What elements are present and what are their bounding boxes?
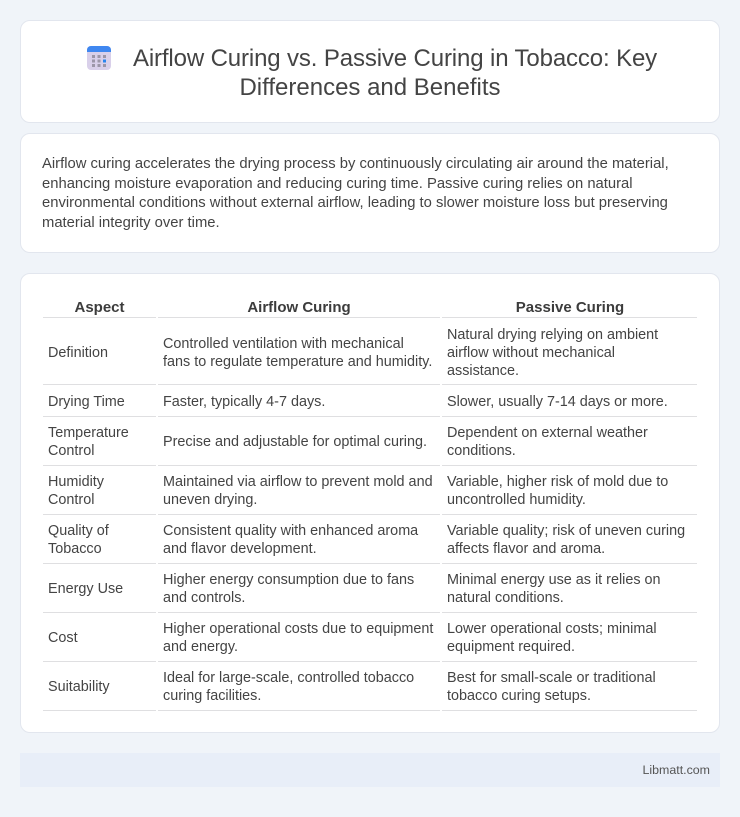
table rows: Higher energy consumption due to fans [163,572,414,588]
intro paragraph: environmental conditions without external airflow, leading to slower moisture loss but preserving [42,195,668,211]
intro paragraph: enhancing moisture evaporation and reducing curing time. Passive curing relies on natural [42,176,633,192]
table rows: Natural drying relying on ambient [447,327,658,343]
table rows: Energy Use [48,581,123,597]
table rows: Best for small-scale or traditional [447,670,656,686]
table rows: Definition [48,345,108,361]
title [133,45,657,100]
table rows: equipment required. [447,639,575,655]
table rows: tobacco curing setups. [447,688,591,704]
title: Differences and Benefits [239,74,501,100]
footer bar [20,753,720,787]
table rows: Temperature [48,425,129,441]
table rows: and flavor development. [163,541,317,557]
table rows: Minimal energy use as it relies on [447,572,661,588]
table rows: Variable quality; risk of uneven curing [447,523,685,539]
table rows: airflow without mechanical [447,345,615,361]
table rows: Dependent on external weather [447,425,648,441]
table rows: Tobacco [48,541,102,557]
table header: Aspect [74,299,125,316]
table rows: fans to regulate temperature and humidity. [163,354,432,370]
table rows: and controls. [163,590,245,606]
intro paragraph [42,156,669,231]
table rows: Control [48,443,94,459]
table header: Passive Curing [516,299,624,316]
header panel [20,20,720,123]
table rows: Maintained via airflow to prevent mold and [163,474,433,490]
table rows: Higher operational costs due to equipment [163,621,433,637]
footer text: Libmatt.com [643,763,710,777]
table rows: curing facilities. [163,688,261,704]
table rows: conditions. [447,443,516,459]
intro paragraph: Airflow curing accelerates the drying process by continuously circulating air around the material, [42,156,669,172]
table rows: uneven drying. [163,492,257,508]
table rows: Consistent quality with enhanced aroma [163,523,418,539]
table rows: assistance. [447,363,519,379]
table rows: Precise and adjustable for optimal curing. [163,434,427,450]
table rows: Suitability [48,679,110,695]
table rows: Cost [48,630,78,646]
table header [74,299,624,316]
table rows: Drying Time [48,394,125,410]
table rows: Slower, usually 7-14 days or more. [447,394,668,410]
table rows: Humidity [48,474,104,490]
table rows: Quality of [48,523,109,539]
table rows: natural conditions. [447,590,564,606]
intro paragraph: material integrity over time. [42,215,220,231]
table rows: Control [48,492,94,508]
title: Airflow Curing vs. Passive Curing in Tobacco: Key [133,45,657,72]
intro text panel [20,133,720,253]
table rows: Controlled ventilation with mechanical [163,336,404,352]
table rows: Faster, typically 4-7 days. [163,394,325,410]
comparison table panel [20,273,720,733]
table rows: affects flavor and aroma. [447,541,605,557]
icon: calendar [87,46,111,70]
table rows [43,317,697,711]
table rows: Lower operational costs; minimal [447,621,657,637]
table rows: Ideal for large-scale, controlled tobacco [163,670,414,686]
table header: Airflow Curing [247,299,351,316]
table rows: uncontrolled humidity. [447,492,586,508]
table rows: and energy. [163,639,238,655]
table rows: Variable, higher risk of mold due to [447,474,668,490]
